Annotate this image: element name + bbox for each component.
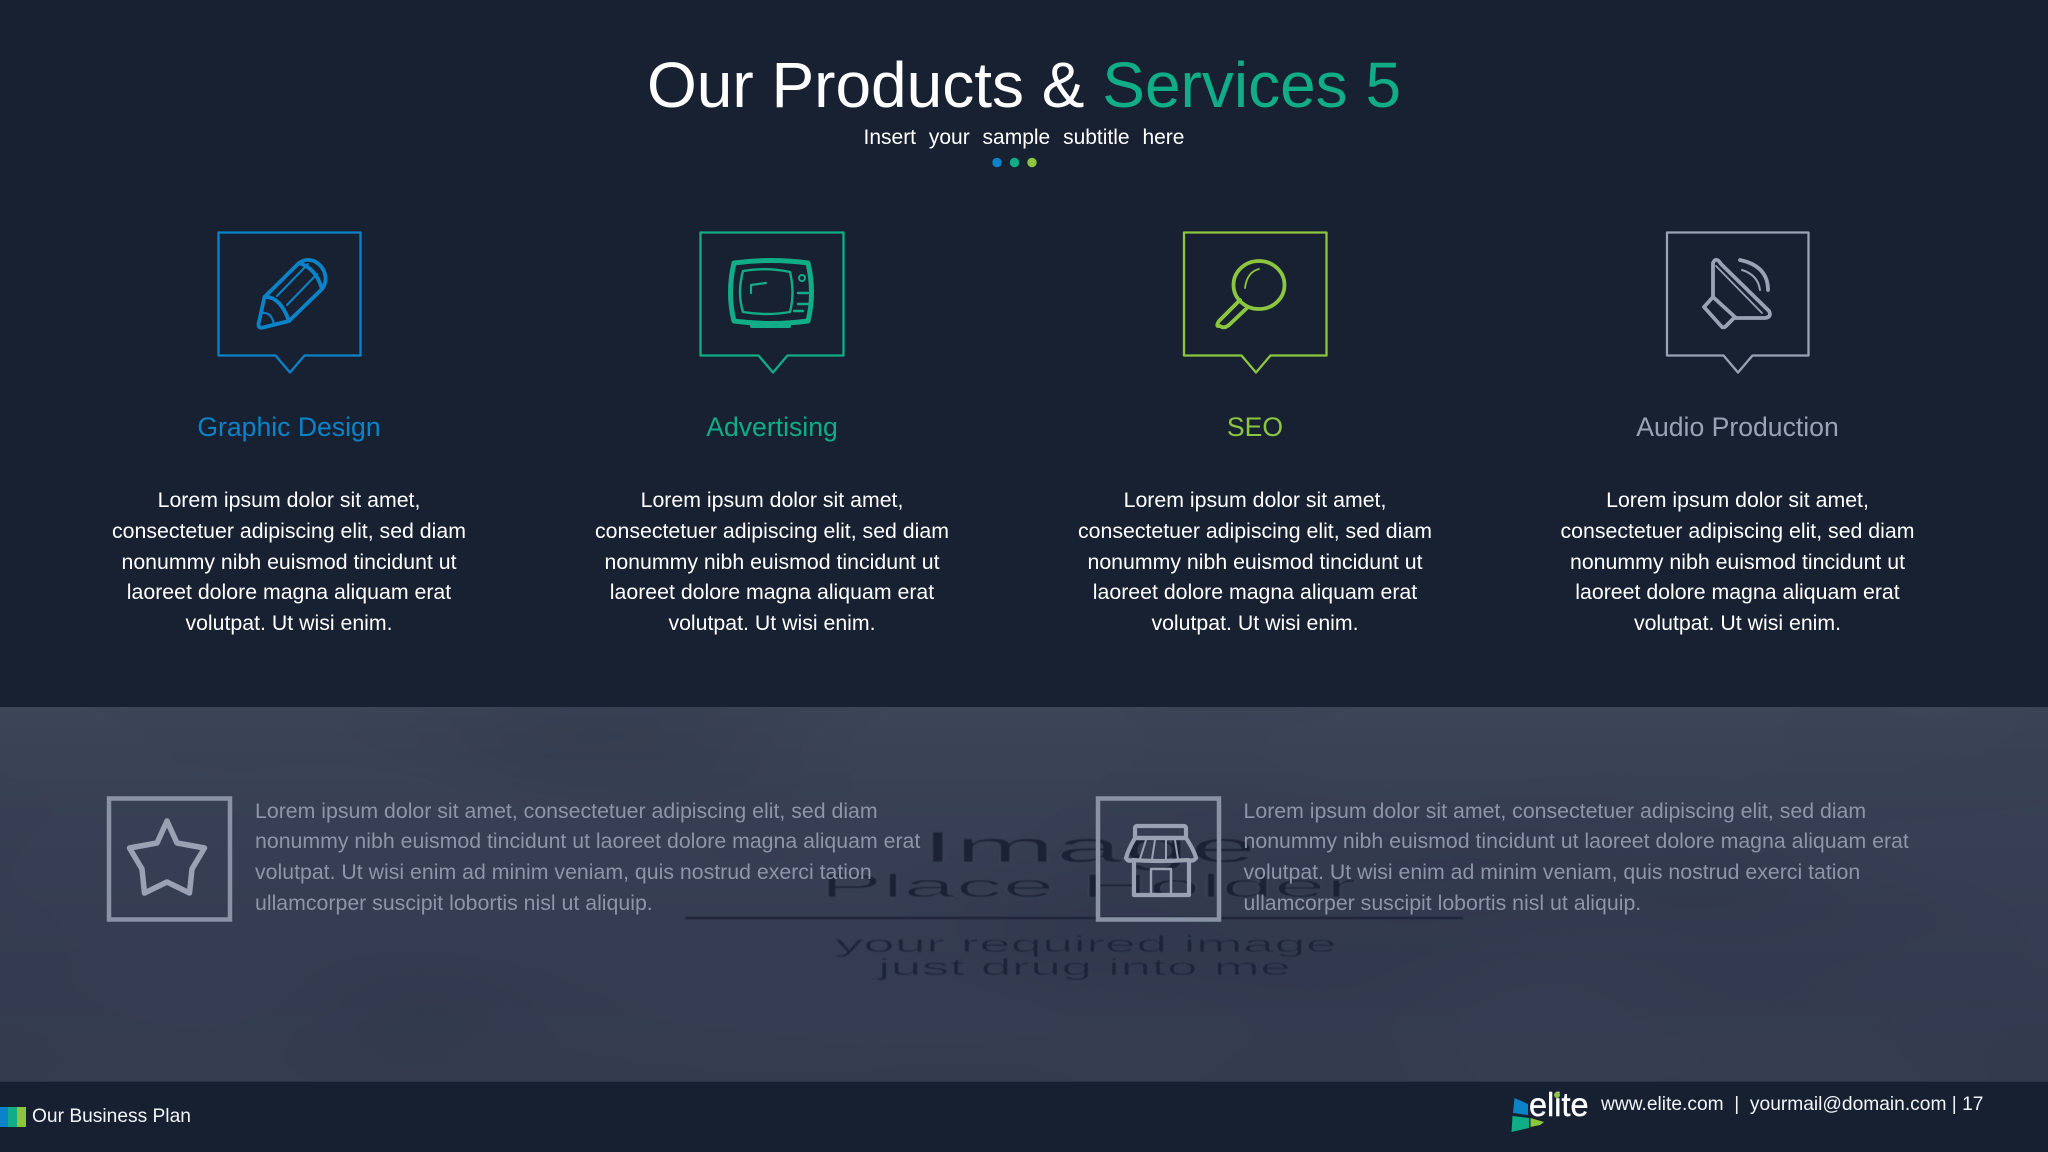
placeholder text: Place Holder	[820, 868, 1358, 904]
placeholder text	[685, 823, 1463, 980]
column: Audio Production: Audio Production	[1636, 412, 1839, 442]
column: Advertising: volutpat. Ut wisi enim.	[668, 611, 876, 635]
placeholder text: your required image	[835, 931, 1337, 957]
column: SEO: laoreet dolore magna aliquam erat	[1093, 580, 1417, 604]
column: Audio Production: Lorem ipsum dolor sit amet,	[1606, 488, 1869, 512]
column: Advertising: consectetuer adipiscing elit, sed diam	[595, 519, 949, 543]
column: Advertising: nonummy nibh euismod tincidunt ut	[604, 550, 940, 574]
logo: elite	[1512, 1086, 1588, 1132]
icon box: star	[106, 796, 232, 922]
column: Audio Production: laoreet dolore magna aliquam erat	[1575, 580, 1900, 604]
logo: elite: elite	[1529, 1086, 1588, 1123]
column: Graphic Design	[112, 412, 466, 635]
decorative three dots	[992, 158, 1037, 168]
column: Graphic Design: Lorem ipsum dolor sit amet,	[158, 488, 420, 512]
text block: right paragraph: ullamcorper suscipit lobortis nisl ut aliquip.	[1244, 891, 1641, 915]
column: Audio Production: consectetuer adipiscing elit, sed diam	[1561, 519, 1914, 543]
text block: right paragraph: Lorem ipsum dolor sit amet, consectetuer adipiscing elit, sed diam	[1244, 799, 1866, 823]
text block: left paragraph	[255, 799, 920, 915]
icon: pencil	[258, 260, 326, 328]
column: SEO: volutpat. Ut wisi enim.	[1151, 611, 1359, 635]
footer colour square	[0, 1107, 26, 1127]
column: SEO: Lorem ipsum dolor sit amet,	[1124, 488, 1386, 512]
footer label: Our Business Plan	[32, 1106, 191, 1126]
placeholder text: Image	[921, 823, 1257, 872]
icon card: magnifier	[1182, 231, 1328, 374]
text block: right paragraph: volutpat. Ut wisi enim ad minim veniam, quis nostrud exerci tation	[1244, 860, 1860, 884]
icon card: speaker	[1666, 231, 1810, 374]
column: SEO: nonummy nibh euismod tincidunt ut	[1087, 550, 1423, 574]
placeholder text: just drug into me	[876, 954, 1291, 980]
column: Advertising: Lorem ipsum dolor sit amet,	[641, 488, 903, 512]
icon card: pencil	[217, 231, 362, 374]
icon: speaker	[1704, 260, 1770, 327]
subtitle: Insert your sample subtitle here	[864, 126, 1184, 149]
column: SEO: SEO	[1227, 412, 1283, 442]
column: SEO	[1078, 412, 1432, 635]
text block: right paragraph	[1244, 799, 1909, 915]
column: Audio Production	[1561, 412, 1914, 635]
icon: magnifier	[1217, 261, 1284, 327]
column: Advertising: laoreet dolore magna aliquam erat	[610, 580, 934, 604]
column: SEO: consectetuer adipiscing elit, sed diam	[1078, 519, 1432, 543]
text block: left paragraph: Lorem ipsum dolor sit amet, consectetuer adipiscing elit, sed diam	[255, 799, 878, 823]
panel: image placeholder band	[0, 707, 2048, 1081]
column: Graphic Design: consectetuer adipiscing elit, sed diam	[112, 519, 466, 543]
text block: left paragraph: ullamcorper suscipit lobortis nisl ut aliquip.	[255, 891, 653, 915]
footer contact: www.elite.com | yourmail@domain.com | 17	[1601, 1094, 1983, 1114]
icon box: store	[1096, 796, 1222, 922]
title: Our Products & Services 5	[647, 49, 1401, 121]
icon card: television	[699, 231, 845, 374]
column: Advertising: Advertising	[706, 412, 838, 442]
column: Graphic Design: Graphic Design	[197, 412, 381, 442]
text block: right paragraph: nonummy nibh euismod tincidunt ut laoreet dolore magna aliquam erat	[1244, 829, 1909, 853]
text block: left paragraph: nonummy nibh euismod tincidunt ut laoreet dolore magna aliquam erat	[255, 829, 920, 853]
column: Graphic Design: volutpat. Ut wisi enim.	[185, 611, 393, 635]
icon: television	[730, 260, 812, 326]
column: Graphic Design: laoreet dolore magna aliquam erat	[127, 580, 451, 604]
footer bar	[0, 1081, 2048, 1152]
column: Audio Production: nonummy nibh euismod tincidunt ut	[1570, 550, 1905, 574]
text block: left paragraph: volutpat. Ut wisi enim ad minim veniam, quis nostrud exerci tation	[255, 860, 872, 884]
column: Advertising	[595, 412, 949, 635]
column: Graphic Design: nonummy nibh euismod tincidunt ut	[121, 550, 457, 574]
column: Audio Production: volutpat. Ut wisi enim.	[1634, 611, 1841, 635]
